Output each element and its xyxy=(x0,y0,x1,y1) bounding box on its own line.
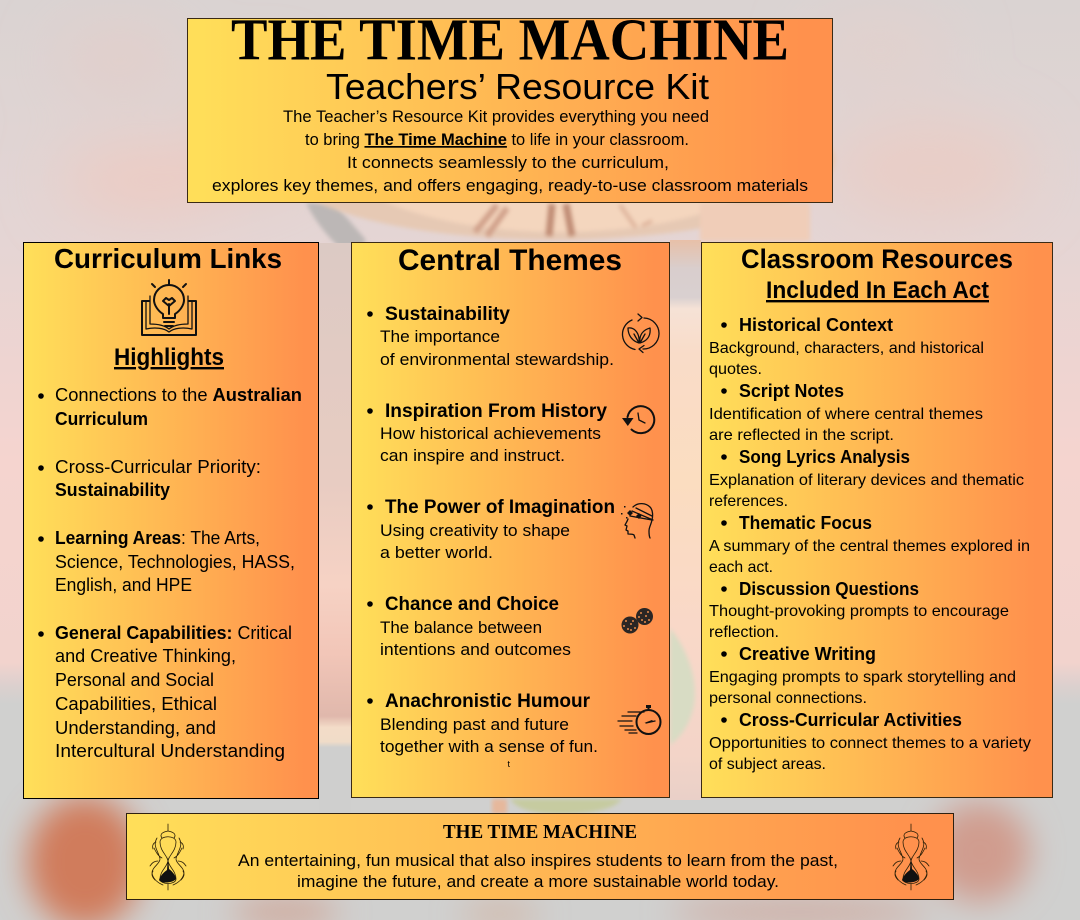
resource: creative writing: Engaging prompts to spark storytelling and xyxy=(709,669,1016,686)
theme: sustainability xyxy=(367,303,614,369)
resource: historical context: quotes. xyxy=(709,361,762,378)
list: curriculum highlights: English, and HPE xyxy=(55,575,192,595)
list: curriculum highlights: General Capabilities: Critical xyxy=(55,623,292,643)
theme: chance and choice: The balance between xyxy=(380,618,542,637)
intro text: to bring The Time Machine to life in your classroom. xyxy=(305,130,689,149)
theme: inspiration from history: How historical achievements xyxy=(380,424,601,443)
list: curriculum highlights: Intercultural Understanding xyxy=(55,741,285,761)
theme: anachronistic humour: Anachronistic Humour xyxy=(385,690,590,712)
theme: the power of imagination: The Power of Imagination xyxy=(385,496,615,518)
intro text: explores key themes, and offers engaging, ready-to-use classroom materials xyxy=(212,176,808,195)
heading: central themes: Central Themes xyxy=(398,244,622,277)
icon: book with light bulb xyxy=(142,280,196,335)
theme: inspiration from history xyxy=(367,400,607,465)
list: curriculum highlights: and Creative Thinking, xyxy=(55,646,236,666)
theme: sustainability: Sustainability xyxy=(385,303,510,325)
list: curriculum highlights: Capabilities, Ethical xyxy=(55,694,217,714)
list: curriculum highlights: Understanding, and xyxy=(55,718,216,738)
theme: anachronistic humour: together with a sense of fun. xyxy=(380,737,598,756)
list: curriculum highlights: Science, Technologies, HASS, xyxy=(55,552,295,572)
resource: discussion questions: Thought-provoking prompts to encourage xyxy=(709,603,1009,620)
theme: inspiration from history: Inspiration From History xyxy=(385,400,607,422)
icon: head with imagination xyxy=(621,504,653,538)
theme: the power of imagination: a better world. xyxy=(380,543,493,562)
clock numerals xyxy=(475,204,652,236)
stray letter: t xyxy=(508,759,510,769)
resource: discussion questions: Discussion Questions xyxy=(739,578,919,599)
resource: script notes xyxy=(709,380,983,444)
list: curriculum highlights: Learning Areas: The Arts, xyxy=(55,528,260,548)
subheading: included in each act: Included In Each Act xyxy=(766,277,989,304)
theme: chance and choice: intentions and outcomes xyxy=(380,640,571,659)
gutter: right xyxy=(670,240,701,800)
clock shadow edge xyxy=(306,203,366,258)
resource: historical context: Background, characters, and historical xyxy=(709,340,984,357)
lime xyxy=(670,628,695,745)
gutter: left xyxy=(319,243,351,813)
resource: historical context: Historical Context xyxy=(739,314,893,335)
footer text xyxy=(238,851,838,891)
panel: curriculum links xyxy=(24,242,318,798)
clock rim xyxy=(275,80,835,240)
subtitle: Teachers’ Resource Kit xyxy=(326,66,709,107)
resource: cross-curricular activities xyxy=(709,709,1031,773)
resource: cross-curricular activities: Cross-Curricular Activities xyxy=(739,709,962,730)
theme: anachronistic humour xyxy=(367,690,598,756)
list: curriculum highlights: Connections to the Australian xyxy=(55,385,302,405)
footer text: imagine the future, and create a more sustainable world today. xyxy=(297,872,779,891)
theme: chance and choice xyxy=(367,593,571,659)
icon: history clock xyxy=(622,406,654,433)
header panel xyxy=(188,6,832,202)
resource: script notes: Script Notes xyxy=(739,380,844,401)
resource: cross-curricular activities: Opportunities to connect themes to a variety xyxy=(709,735,1031,752)
footer banner xyxy=(126,814,954,900)
icon: ornate hourglass right xyxy=(893,824,929,890)
resource: song lyrics analysis: Explanation of literary devices and thematic xyxy=(709,472,1024,489)
footer title: THE TIME MACHINE xyxy=(443,821,637,843)
theme: the power of imagination: Using creativity to shape xyxy=(380,521,570,540)
resource: song lyrics analysis: Song Lyrics Analysis xyxy=(739,446,910,467)
resource: song lyrics analysis xyxy=(709,446,1024,510)
title: THE TIME MACHINE xyxy=(231,6,789,72)
resource: discussion questions: reflection. xyxy=(709,624,779,641)
resource: creative writing: Creative Writing xyxy=(739,643,876,664)
resource: thematic focus: each act. xyxy=(709,559,773,576)
icon: fast stopwatch xyxy=(618,705,660,734)
resource: creative writing: personal connections. xyxy=(709,690,867,707)
resource: cross-curricular activities: of subject areas. xyxy=(709,756,826,773)
list: curriculum highlights xyxy=(38,385,302,761)
resource: song lyrics analysis: references. xyxy=(709,493,788,510)
icon: dice xyxy=(622,608,653,634)
theme: the power of imagination xyxy=(367,496,615,562)
resource: discussion questions xyxy=(709,578,1009,641)
intro text: It connects seamlessly to the curriculum, xyxy=(347,153,669,172)
icon: leaf cycle xyxy=(622,314,659,352)
list: curriculum highlights: Personal and Social xyxy=(55,670,214,690)
list: curriculum highlights: Cross-Curricular Priority: xyxy=(55,457,261,477)
intro text xyxy=(212,107,808,195)
subheading: highlights: Highlights xyxy=(114,344,224,371)
resource: thematic focus xyxy=(709,512,1030,576)
theme: sustainability: The importance xyxy=(380,327,500,346)
panel: classroom resources xyxy=(702,242,1052,798)
resource: thematic focus: A summary of the central themes explored in xyxy=(709,538,1030,555)
list: curriculum highlights: Curriculum xyxy=(55,409,148,429)
resource: script notes: are reflected in the script. xyxy=(709,427,894,444)
lime base xyxy=(510,799,622,814)
list: curriculum highlights: Sustainability xyxy=(55,480,170,500)
heading: classroom resources: Classroom Resources xyxy=(741,244,1013,274)
resource: script notes: Identification of where central themes xyxy=(709,406,983,423)
resource: creative writing xyxy=(709,643,1016,707)
icon: ornate hourglass left xyxy=(150,824,186,890)
footer text: An entertaining, fun musical that also inspires students to learn from the past, xyxy=(238,851,838,870)
theme: inspiration from history: can inspire and instruct. xyxy=(380,446,565,465)
heading: curriculum links: Curriculum Links xyxy=(54,243,282,274)
intro text: The Teacher’s Resource Kit provides everything you need xyxy=(283,107,709,126)
resource: historical context xyxy=(709,314,984,378)
theme: anachronistic humour: Blending past and future xyxy=(380,715,569,734)
panel: central themes xyxy=(352,242,670,798)
resource: thematic focus: Thematic Focus xyxy=(739,512,872,533)
theme: sustainability: of environmental stewardship. xyxy=(380,350,614,369)
theme: chance and choice: Chance and Choice xyxy=(385,593,559,615)
